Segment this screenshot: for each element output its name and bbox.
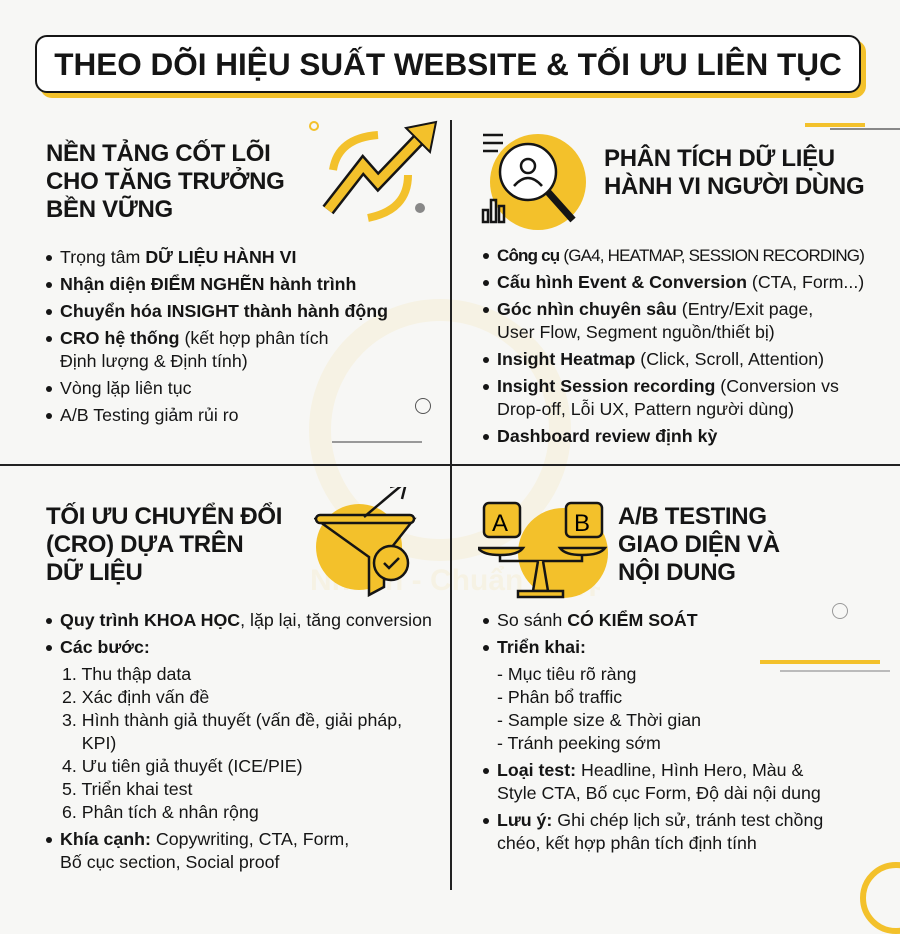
heading: GIAO DIỆN VÀ xyxy=(618,531,780,558)
bullets: Lưu ý: Ghi chép lịch sử, tránh test chồng xyxy=(497,810,823,830)
bullets: - Mục tiêu rõ ràng xyxy=(497,664,636,684)
bullets: A/B Testing giảm rủi ro xyxy=(60,405,239,425)
bullets: Định lượng & Định tính) xyxy=(60,351,248,371)
panel: behavior analysis xyxy=(482,134,864,446)
bullets xyxy=(483,610,823,853)
bullets: Góc nhìn chuyên sâu (Entry/Exit page, xyxy=(497,299,813,319)
bullets: 3. Hình thành giả thuyết (vấn đề, giải pháp, xyxy=(62,710,402,730)
bullets: Vòng lặp liên tục xyxy=(60,378,191,398)
bullets: Bố cục section, Social proof xyxy=(60,852,279,872)
bullets xyxy=(483,246,864,446)
bullets: Drop-off, Lỗi UX, Pattern người dùng) xyxy=(497,399,794,419)
bullets: 4. Ưu tiên giả thuyết (ICE/PIE) xyxy=(62,756,303,776)
bullets: 1. Thu thập data xyxy=(62,664,191,684)
title: THEO DÕI HIỆU SUẤT WEBSITE & TỐI ƯU LIÊN TỤC xyxy=(54,46,842,82)
panel: A/B testing xyxy=(478,502,823,853)
bullets: Các bước: xyxy=(60,637,150,657)
icon: magnifier analytics xyxy=(482,134,586,230)
bullets: So sánh CÓ KIỂM SOÁT xyxy=(497,610,698,630)
heading: TỐI ƯU CHUYỂN ĐỔI xyxy=(46,503,282,530)
bullets: 2. Xác định vấn đề xyxy=(62,687,209,707)
bullets: chéo, kết hợp phân tích định tính xyxy=(497,833,757,853)
bullets: Công cụ (GA4, HEATMAP, SESSION RECORDING) xyxy=(497,246,864,265)
heading: CHO TĂNG TRƯỞNG xyxy=(46,168,285,195)
icon: funnel xyxy=(314,487,416,598)
icon: A/B scale: A xyxy=(492,510,508,537)
heading: A/B TESTING xyxy=(618,503,767,530)
panel: core foundation xyxy=(46,120,438,425)
heading xyxy=(46,502,282,586)
bullets: Quy trình KHOA HỌC, lặp lại, tăng conversion xyxy=(60,610,432,630)
heading: BỀN VỮNG xyxy=(46,196,173,223)
watermark logo xyxy=(309,299,600,597)
icon: A/B scale xyxy=(478,502,608,598)
bullets: Cấu hình Event & Conversion (CTA, Form...) xyxy=(497,272,864,292)
bullets: Khía cạnh: Copywriting, CTA, Form, xyxy=(60,829,349,849)
title xyxy=(35,35,861,93)
heading xyxy=(604,144,864,200)
icon: growth arrows xyxy=(309,120,438,222)
bullets: Insight Session recording (Conversion vs xyxy=(497,376,839,396)
bullets: 6. Phân tích & nhân rộng xyxy=(62,802,259,822)
heading: DỮ LIỆU xyxy=(46,559,142,586)
bullets: 5. Triển khai test xyxy=(62,779,192,799)
watermark logo: Nhanh - Chuẩn - Đẹp xyxy=(310,564,600,597)
heading xyxy=(46,139,285,223)
bullets: Style CTA, Bố cục Form, Độ dài nội dung xyxy=(497,783,821,803)
heading: PHÂN TÍCH DỮ LIỆU xyxy=(604,145,835,172)
bullets: - Tránh peeking sớm xyxy=(497,733,661,753)
bullets xyxy=(46,610,432,872)
bullets: Triển khai: xyxy=(497,637,586,657)
bullets: KPI) xyxy=(82,733,116,753)
heading: HÀNH VI NGƯỜI DÙNG xyxy=(604,173,864,200)
bullets: Insight Heatmap (Click, Scroll, Attention) xyxy=(497,349,824,369)
heading xyxy=(618,503,780,586)
bullets: Nhận diện ĐIỂM NGHẼN hành trình xyxy=(60,274,356,294)
heading: NỀN TẢNG CỐT LÕI xyxy=(46,140,271,167)
panel: CRO xyxy=(46,487,432,872)
bullets: Chuyển hóa INSIGHT thành hành động xyxy=(60,301,388,321)
bullets: CRO hệ thống (kết hợp phân tích xyxy=(60,328,329,348)
heading: NỘI DUNG xyxy=(618,559,736,586)
bullets: - Sample size & Thời gian xyxy=(497,710,701,730)
bullets: Trọng tâm DỮ LIỆU HÀNH VI xyxy=(60,247,296,267)
bullets: Loại test: Headline, Hình Hero, Màu & xyxy=(497,760,803,780)
bullets: Dashboard review định kỳ xyxy=(497,426,717,446)
bullets: User Flow, Segment nguồn/thiết bị) xyxy=(497,322,775,342)
bullets: - Phân bổ traffic xyxy=(497,687,622,707)
icon: A/B scale: B xyxy=(574,510,590,537)
bullets xyxy=(46,247,388,425)
heading: (CRO) DỰA TRÊN xyxy=(46,531,243,558)
dividers xyxy=(450,120,452,890)
